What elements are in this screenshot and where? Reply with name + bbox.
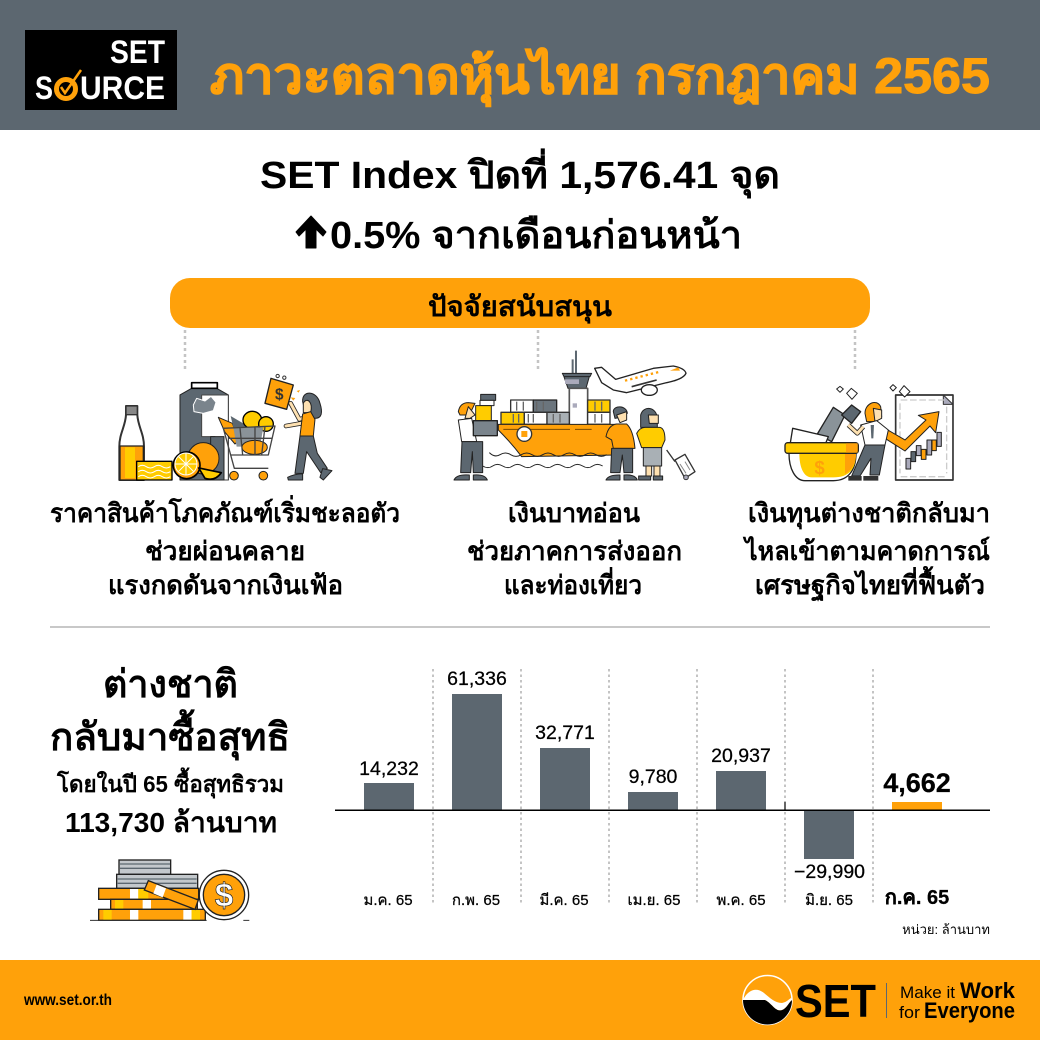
text: factor 3 <box>742 498 990 603</box>
text: foreign net buy summary: ต่างชาติ <box>103 664 238 706</box>
icon: money bowl, investor and chart: $ <box>814 457 825 478</box>
text: factor 1: ราคาสินค้าโภคภัณฑ์เริ่มชะลอตัว <box>50 494 400 528</box>
text: factor 1: แรงกดดันจากเงินเฟ้อ <box>108 570 343 600</box>
text: factor 3: ไหลเข้าตามคาดการณ์ <box>742 535 990 566</box>
banner: supporting factors: ปัจจัยสนับสนุน <box>428 291 612 324</box>
tagline <box>899 978 1016 1023</box>
headline: SET Index close: SET Index ปิดที่ 1,576.41 จุด <box>260 148 780 199</box>
bar chart: monthly foreign net buy: 61,336 <box>447 668 507 690</box>
text: factor 2: เงินบาทอ่อน <box>508 498 640 528</box>
website: www.set.or.th <box>23 992 112 1009</box>
bar chart: monthly foreign net buy: มี.ค. 65 <box>539 892 589 909</box>
icon: groceries and shopper <box>119 374 332 480</box>
logo: SET Source: SET <box>110 34 165 70</box>
tagline: Everyone <box>924 998 1015 1023</box>
bar chart: monthly foreign net buy: หน่วย: ล้านบาท <box>902 922 990 937</box>
header band <box>0 0 1040 130</box>
bar chart: monthly foreign net buy: 14,232 <box>359 758 419 780</box>
icon: coins: $ <box>215 878 234 915</box>
text: foreign net buy summary: 113,730 ล้านบาท <box>65 807 277 838</box>
title: ภาวะตลาดหุ้นไทย กรกฎาคม 2565 <box>210 47 990 107</box>
bar chart: monthly foreign net buy: 9,780 <box>629 766 678 788</box>
icon: groceries and shopper: $ <box>275 386 284 403</box>
logo: SET <box>743 975 876 1027</box>
bar chart: monthly foreign net buy <box>335 668 990 937</box>
text: factor 2 <box>467 498 682 600</box>
headline: monthly change: 0.5% จากเดือนก่อนหน้า <box>330 215 742 257</box>
text: foreign net buy summary: โดยในปี 65 ซื้อสุทธิรวม <box>56 767 284 799</box>
text: foreign net buy summary <box>50 664 290 838</box>
bar chart: monthly foreign net buy: 32,771 <box>535 722 595 744</box>
bar chart: monthly foreign net buy: 20,937 <box>711 745 771 767</box>
bar chart: monthly foreign net buy: พ.ค. 65 <box>716 892 766 909</box>
icon: coins <box>90 860 249 920</box>
icon: ship, plane and travellers <box>454 351 695 480</box>
bar chart: monthly foreign net buy: −29,990 <box>794 861 865 883</box>
logo: SET: SET <box>795 975 876 1027</box>
text: factor 3: เงินทุนต่างชาติกลับมา <box>748 498 990 530</box>
tagline: Make it <box>900 983 955 1002</box>
logo: SET Source <box>25 30 177 110</box>
tagline: for <box>899 1003 920 1022</box>
footer band <box>0 960 1040 1040</box>
text: factor 2: ช่วยภาคการส่งออก <box>467 536 682 566</box>
tagline: Work <box>960 978 1016 1003</box>
text: factor 1: ช่วยผ่อนคลาย <box>145 536 305 566</box>
logo: SET Source: URCE <box>80 70 165 106</box>
icon: money bowl, investor and chart <box>785 385 953 481</box>
text: factor 3: เศรษฐกิจไทยที่ฟื้นตัว <box>755 565 985 603</box>
bar chart: monthly foreign net buy: เม.ย. 65 <box>628 892 680 909</box>
bar chart: monthly foreign net buy: ก.พ. 65 <box>452 892 500 909</box>
bar chart: monthly foreign net buy: ม.ค. 65 <box>363 892 413 909</box>
bar chart: monthly foreign net buy: 4,662 <box>883 768 951 798</box>
banner: supporting factors <box>170 278 870 328</box>
text: factor 1 <box>50 494 400 600</box>
logo: SET Source: S <box>35 70 53 106</box>
text: foreign net buy summary: กลับมาซื้อสุทธิ <box>50 709 290 761</box>
text: factor 2: และท่องเที่ยว <box>504 566 642 600</box>
bar chart: monthly foreign net buy: ก.ค. 65 <box>885 887 949 909</box>
bar chart: monthly foreign net buy: มิ.ย. 65 <box>805 892 853 909</box>
